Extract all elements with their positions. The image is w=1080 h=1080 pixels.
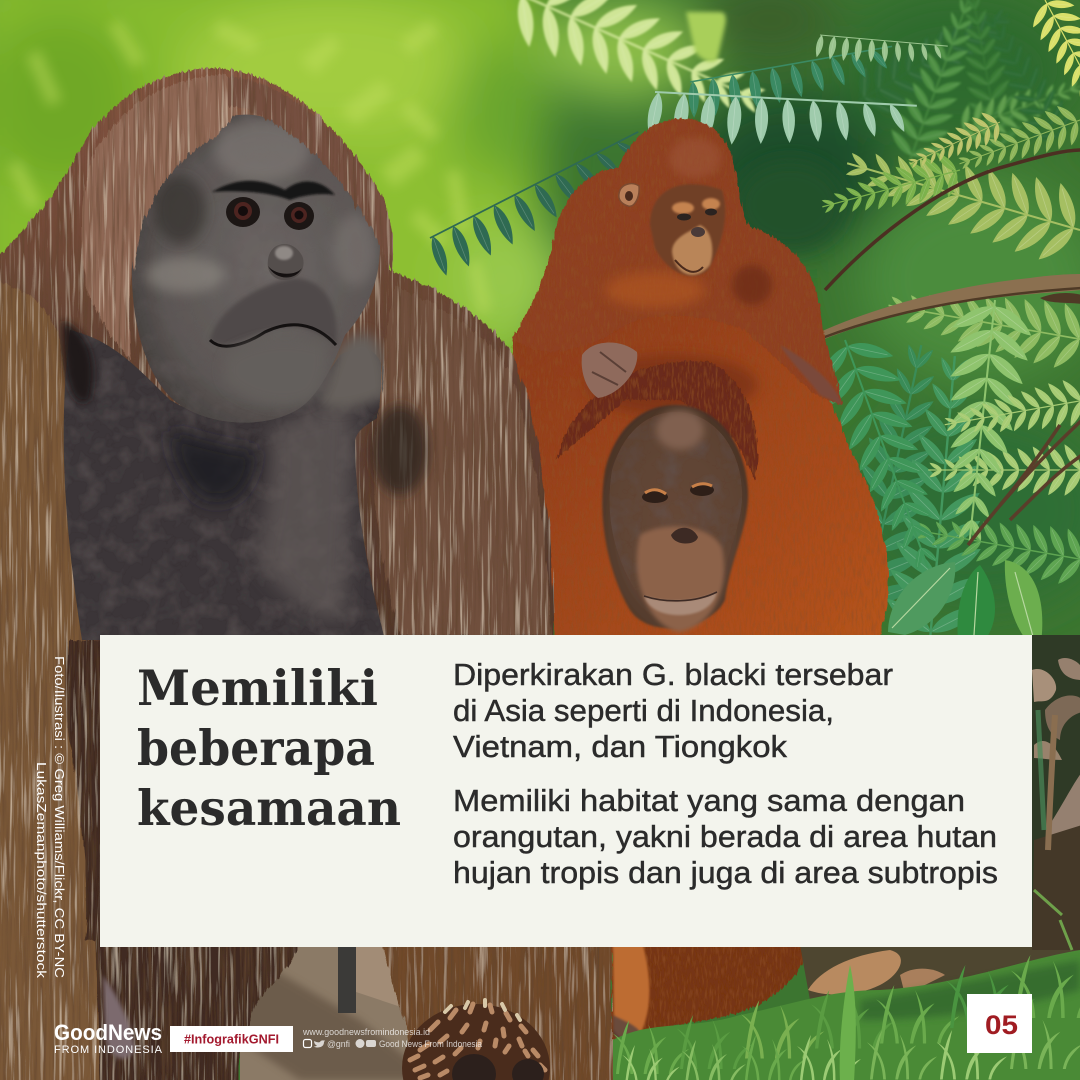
giganto: muzzle and lip	[210, 278, 337, 405]
right strip: tan dead leaves	[1032, 635, 1080, 950]
giganto: light cheek	[145, 257, 225, 293]
text block: habitat: hujan tropis dan juga di area subtropis	[453, 855, 998, 890]
baby: eyes	[677, 214, 691, 220]
baby: nose and mouth	[691, 227, 705, 237]
giganto: right arm hair	[374, 285, 552, 635]
social media line: www.goodnewsfromindonesia.id	[302, 1027, 430, 1037]
giganto: face	[132, 115, 380, 423]
giganto: eye right	[284, 202, 314, 230]
baby: darker armpit	[732, 265, 772, 305]
photo credit: LukasZemanphoto/shutterstock	[34, 762, 49, 979]
panel: text card	[100, 635, 1032, 947]
orangutan hand	[613, 945, 649, 1042]
orangutan knuckle shade	[613, 1015, 644, 1046]
channel name: Good News From Indonesia	[379, 1039, 482, 1049]
floor shadow	[240, 950, 410, 1080]
orangutans	[512, 118, 889, 640]
frond: dark teal top left of baby	[422, 130, 658, 281]
baby orangutan: body and head	[512, 118, 842, 405]
left leg fur	[0, 940, 105, 1080]
photo credit	[34, 656, 67, 979]
logo: GoodNews from Indonesia: GoodNews	[54, 1020, 162, 1045]
orangutan leg	[612, 945, 810, 1040]
dark fur and inner leg	[96, 940, 300, 1080]
icon: youtube	[366, 1040, 376, 1047]
frond: upper dark right of baby	[683, 45, 899, 121]
right fur	[380, 940, 612, 1080]
text block: distribution: Vietnam, dan Tiongkok	[453, 729, 788, 764]
icon: instagram	[304, 1040, 312, 1048]
adult orangutan: body	[512, 301, 889, 640]
giganto: shadow under the right arm	[372, 405, 428, 495]
page number: 05	[985, 1010, 1018, 1040]
dark gap behind baby	[735, 160, 845, 250]
baby: face	[650, 184, 725, 276]
hashtag badge: #InfografikGNFI	[184, 1032, 279, 1046]
baby: head highlight	[669, 138, 721, 178]
baby: left hand	[582, 343, 637, 398]
giganto: dark fur behind arm	[66, 640, 108, 955]
text block: distribution	[453, 657, 893, 764]
giganto: eye left	[226, 197, 260, 227]
twigs lower right	[968, 420, 1080, 545]
tall grass blade	[840, 965, 856, 1080]
fern fronds: lower right	[817, 335, 968, 620]
adult: forehead bump	[656, 410, 704, 450]
text block: habitat: Memiliki habitat yang sama dengan	[453, 783, 965, 818]
adult: dark crown hair	[556, 361, 758, 480]
giganto: left arm	[0, 280, 108, 955]
giganto: chest	[64, 330, 388, 640]
palm nuts	[452, 1054, 496, 1080]
giganto: hair right side of head	[228, 76, 392, 265]
icon: facebook	[356, 1039, 364, 1048]
foliage: fronds behind the animals	[422, 0, 1080, 650]
icon: twitter	[314, 1040, 325, 1048]
adult orangutan: face	[602, 405, 748, 632]
text block: distribution: di Asia seperti di Indonesia,	[453, 693, 834, 728]
giganto: shoulder shadow	[62, 320, 93, 402]
adult: crown shading	[587, 355, 757, 415]
giganto: brow	[212, 181, 335, 200]
adult: nose	[671, 528, 698, 544]
foliage: dark texture fronds upper right	[845, 0, 1080, 170]
heading: Memiliki	[137, 659, 378, 717]
frond: pale blurred top centre	[495, 0, 782, 146]
blurred fern streaks	[8, 20, 492, 314]
social media line	[302, 1027, 482, 1049]
baby: chest orange	[605, 272, 705, 308]
scene below the panel	[0, 635, 1080, 1080]
giganto: dark cheek left	[154, 176, 206, 244]
baby: eyelids	[672, 202, 694, 214]
hashtag badge	[170, 1026, 293, 1052]
frond: pale row right of baby	[644, 89, 917, 155]
adult: lips	[644, 592, 717, 615]
heading: beberapa	[137, 719, 375, 777]
giganto: nose	[268, 244, 304, 280]
page number	[967, 994, 1032, 1053]
logo: GoodNews from Indonesia: FROM INDONESIA	[54, 1044, 163, 1056]
handle: @gnfi	[327, 1039, 350, 1049]
leaves: big glossy leaves near bottom	[888, 560, 1042, 650]
adult: face texture	[609, 412, 742, 590]
leaf litter	[800, 945, 1080, 1000]
giganto: hair and shoulders	[0, 68, 554, 640]
adult: muzzle	[637, 526, 724, 632]
baby: right hand	[780, 345, 842, 405]
heading: kesamaan	[137, 779, 401, 837]
grass base	[613, 950, 1080, 1080]
grass blades	[612, 955, 1080, 1080]
pale inner leg	[103, 975, 135, 1059]
thin dark branch	[825, 150, 1080, 290]
text block: habitat: orangutan, yakni berada di area hutan	[453, 819, 997, 854]
giganto: forehead lighter	[214, 118, 310, 182]
heading	[137, 659, 401, 837]
logo: GoodNews from Indonesia	[54, 1020, 163, 1056]
giganto: neck right	[318, 333, 388, 409]
giganto: chest deep shadow	[170, 430, 258, 503]
leaf: pale square top centre	[686, 12, 726, 62]
text block: distribution: Diperkirakan G. blacki tersebar	[453, 657, 893, 692]
floor	[240, 945, 410, 1080]
palm fruit	[402, 1000, 550, 1080]
photo credit: Foto/Ilustrasi : © Greg Williams/Flickr, CC BY-NC	[52, 656, 67, 978]
Gigantopithecus figure	[0, 68, 554, 955]
giganto: chest highlight	[255, 409, 352, 620]
thick brown branch	[820, 274, 1080, 340]
giganto: forelock over the face	[82, 74, 238, 360]
blurred bright foliage on the left	[0, 0, 1080, 610]
foliage: upper right	[814, 34, 948, 70]
adult: eyes	[642, 491, 668, 503]
text block: habitat	[453, 783, 998, 890]
baby: ear	[619, 184, 639, 206]
post	[338, 945, 356, 1013]
